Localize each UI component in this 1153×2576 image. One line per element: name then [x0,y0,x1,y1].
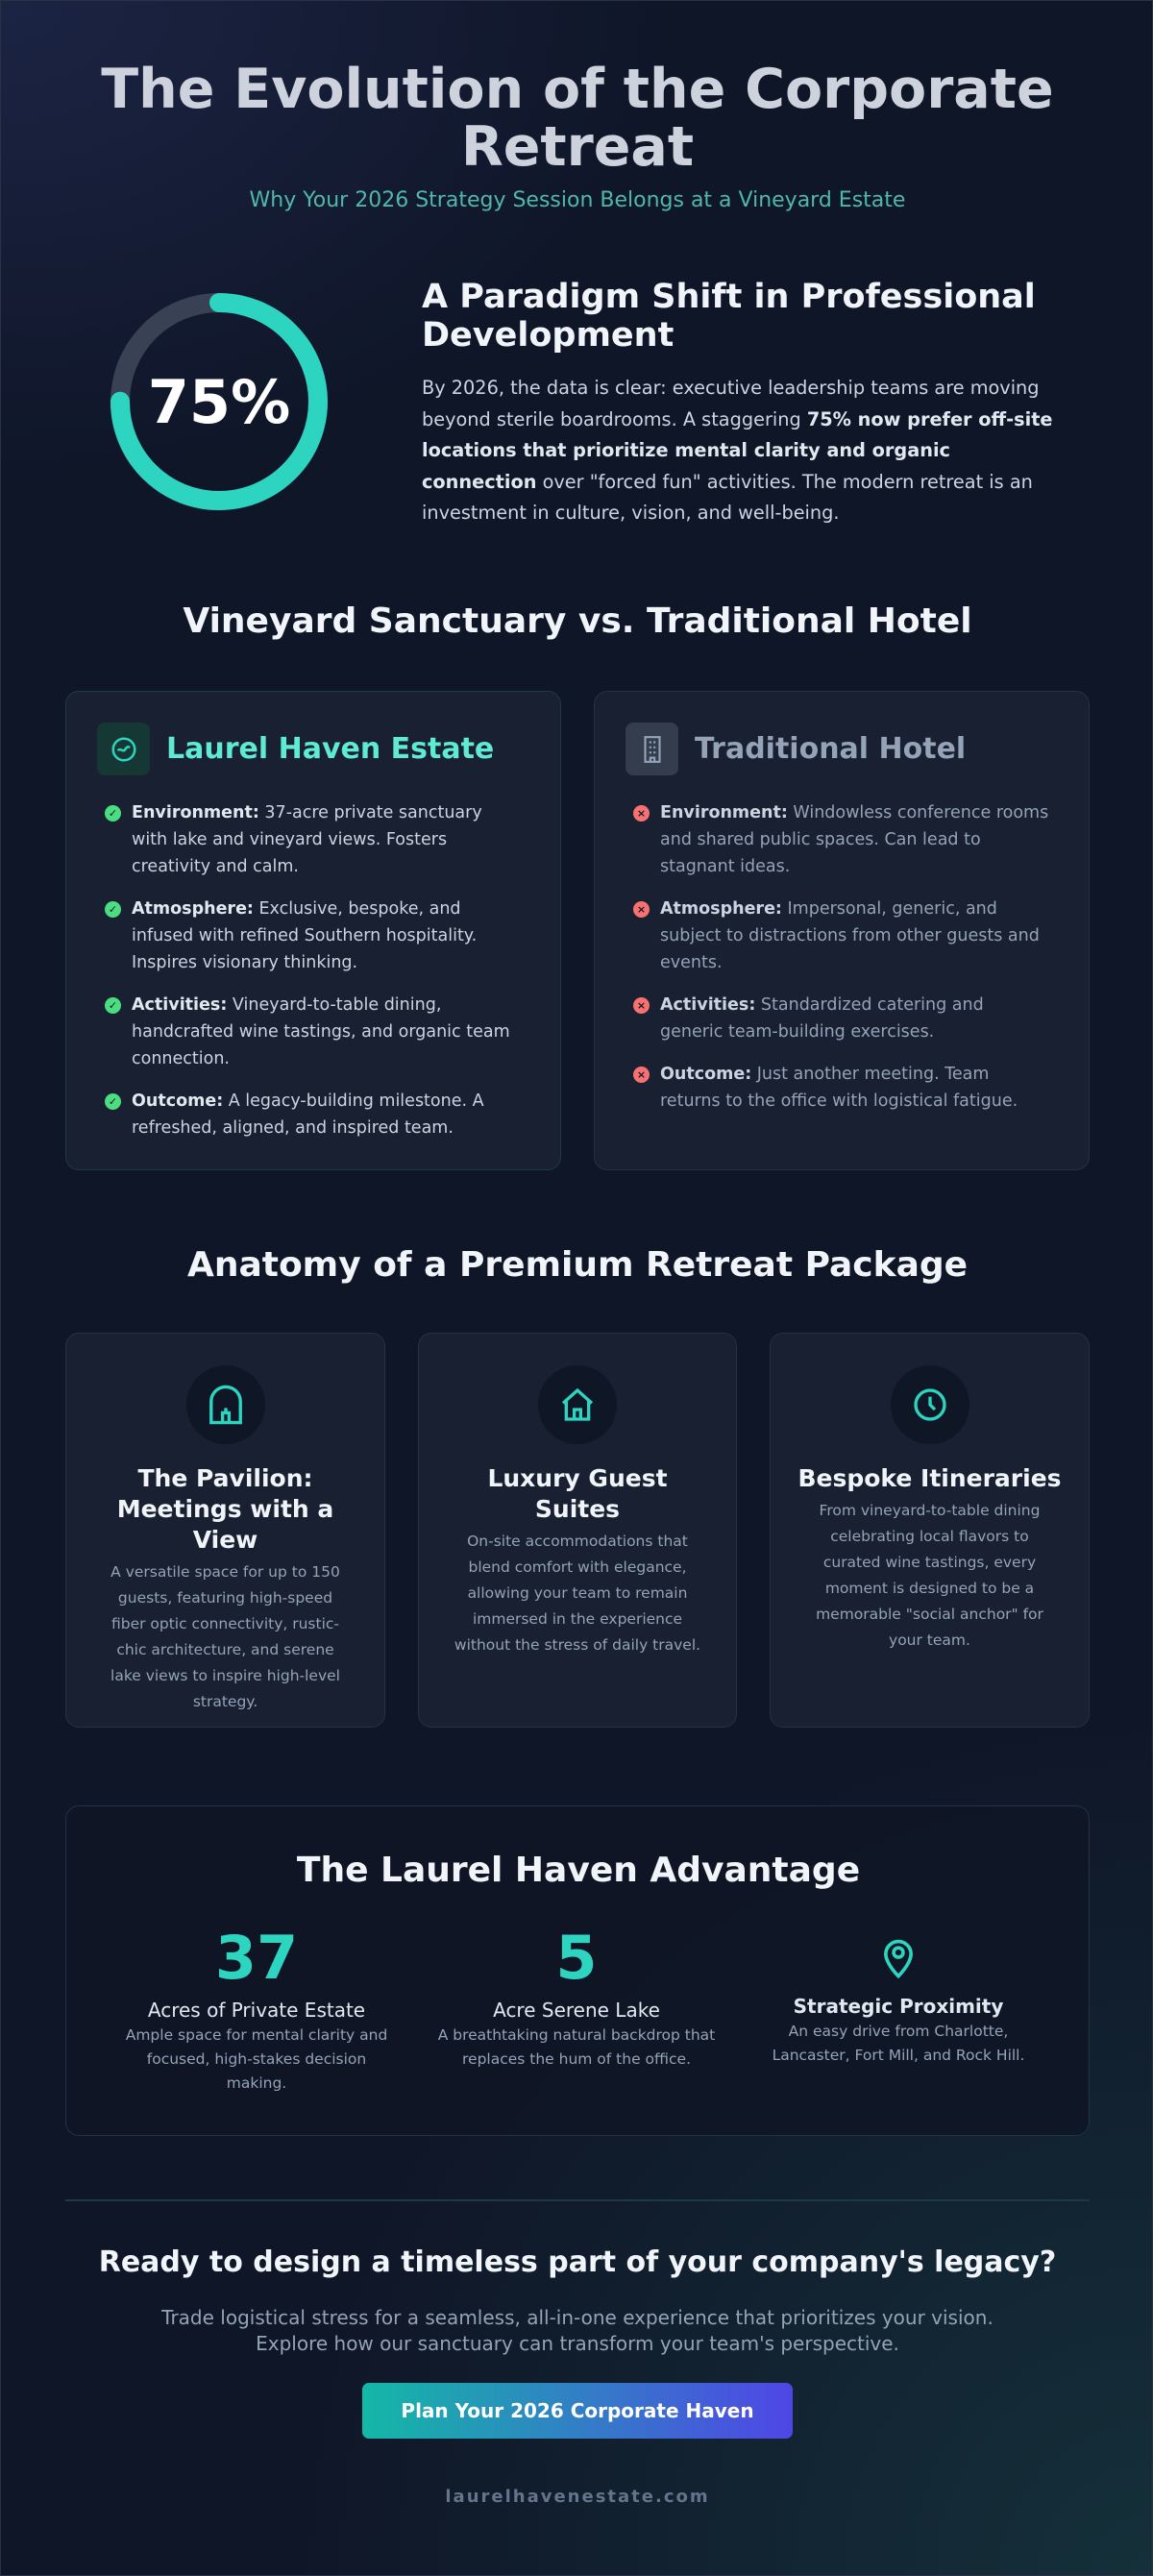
stat: strategic proximity [773,1939,1024,2064]
panel: Laurel Haven Estate: ✓ [109,999,117,1011]
panel: Laurel Haven Estate: ✓ [109,903,117,915]
heading: paradigm shift: A Paradigm Shift in Professional Development [422,278,1036,355]
panel: Traditional Hotel: Atmosphere: Impersonal, generic, and subject to distractions from other guests and events. [660,899,1040,972]
icon: pavilion [186,1365,265,1444]
panel: Traditional Hotel: × [637,903,646,915]
panel: Luxury Guest Suites: On-site accommodations that blend comfort with elegance, allowing your team to remain immersed in the experience without the stress of daily travel. [454,1533,700,1654]
panel: Traditional Hotel [594,691,1090,1170]
donut chart: 75%: 75% [148,367,290,437]
heading: CTA: Ready to design a timeless part of your company's legacy? [99,2245,1056,2279]
heading: anatomy: Anatomy of a Premium Retreat Package [187,1245,968,1285]
heading: advantage: The Laurel Haven Advantage [297,1851,860,1890]
stat: 5 acre lake: A breathtaking natural backdrop that replaces the hum of the office. [438,2026,715,2068]
title: Retreat [461,115,694,179]
card header: Laurel Haven [97,723,494,775]
stat: 37 acres [125,1923,387,2092]
panel: Laurel Haven Advantage [65,1805,1090,2136]
panel: Laurel Haven Estate: ✓ [109,807,117,819]
stat: 5 acre lake: 5 [555,1923,598,1993]
donut chart: 75% [110,293,328,510]
panel: Laurel Haven Estate: Outcome: A legacy-building milestone. A refreshed, aligned, and inspired team. [132,1092,484,1138]
panel: Laurel Haven Estate: ✓ [109,1095,117,1107]
card header: Traditional Hotel [626,723,966,775]
title: The Evolution of the Corporate [101,58,1054,121]
panel: Bespoke Itineraries: Bespoke Itineraries [797,1464,1062,1492]
footer: website: laurelhavenestate.com [445,2487,710,2507]
stat: 37 acres: Acres of Private Estate [148,1999,365,2022]
panel: Traditional Hotel: × [637,1068,646,1080]
panel: Laurel Haven Estate [65,691,561,1170]
icon: clock [890,1365,969,1444]
text block: CTA paragraph [161,2306,994,2355]
panel: Laurel Haven Estate: Environment: 37-acre private sanctuary with lake and vineyard views. Fosters creativity and calm. [132,803,482,876]
panel: The Pavilion: A versatile space for up to 150 guests, featuring high-speed fiber optic connectivity, rustic-chic architecture, and serene lake views to inspire high-level strategy. [110,1563,340,1710]
panel: Traditional Hotel: × [637,999,646,1011]
text block: CTA paragraph: Trade logistical stress for a seamless, all-in-one experience that prioritizes your vision. [161,2306,994,2329]
stat: 37 acres: Ample space for mental clarity and focused, high-stakes decision making. [126,2026,387,2092]
panel: Traditional Hotel: Outcome: Just another meeting. Team returns to the office with logistical fatigue. [660,1065,1018,1111]
button: CTA: Plan Your 2026 Corporate Haven [401,2399,754,2422]
panel: Laurel Haven Estate: Atmosphere: Exclusive, bespoke, and infused with refined Southern hospitality. Inspires visionary thinking. [132,899,477,972]
panel: Laurel Haven Estate: Activities: Vineyard-to-table dining, handcrafted wine tastings, and organic team connection. [132,995,510,1068]
icon: house [538,1365,617,1444]
button: CTA [362,2383,793,2439]
stat: 5 acre lake [438,1923,715,2068]
panel: Traditional Hotel: Environment: Windowless conference rooms and shared public spaces. Can lead to stagnant ideas. [660,803,1048,876]
title [101,58,1054,179]
stat: 5 acre lake: Acre Serene Lake [493,1999,660,2022]
panel: The Pavilion [65,1333,385,1728]
text block: CTA paragraph: Explore how our sanctuary can transform your team's perspective. [256,2332,899,2355]
text block: paradigm paragraph: By 2026, the data is clear: executive leadership teams are moving beyond sterile boardrooms. A staggering 75% now prefer off-site locations that prioritize mental clarity and organic connection over "forced fun" activities. The modern retreat is an investment in culture, vision, and well-being. [422,377,1053,524]
heading: comparison: Vineyard Sanctuary vs. Traditional Hotel [183,601,972,641]
stat: strategic proximity: Strategic Proximity [794,1995,1003,2018]
panel: Traditional Hotel: Activities: Standardized catering and generic team-building exercises. [660,995,984,1042]
panel: Bespoke Itineraries: From vineyard-to-table dining celebrating local flavors to curated wine tastings, every moment is designed to be a memorable "social anchor" for your team. [816,1502,1043,1649]
card header: Laurel Haven: Laurel Haven Estate [166,732,494,766]
stat: strategic proximity: An easy drive from Charlotte, Lancaster, Fort Mill, and Rock Hill. [773,2023,1024,2064]
card header: Traditional Hotel: Traditional Hotel [695,732,966,766]
panel: Bespoke Itineraries [770,1333,1090,1728]
panel: Traditional Hotel: × [637,807,646,819]
panel: Luxury Guest Suites: Luxury Guest Suites [487,1464,668,1523]
panel: Luxury Guest Suites [418,1333,737,1728]
subtitle: Why Your 2026 Strategy Session Belongs at a Vineyard Estate [250,188,905,212]
panel: The Pavilion: The Pavilion: Meetings with a View [117,1464,333,1554]
stat: 37 acres: 37 [215,1923,298,1993]
